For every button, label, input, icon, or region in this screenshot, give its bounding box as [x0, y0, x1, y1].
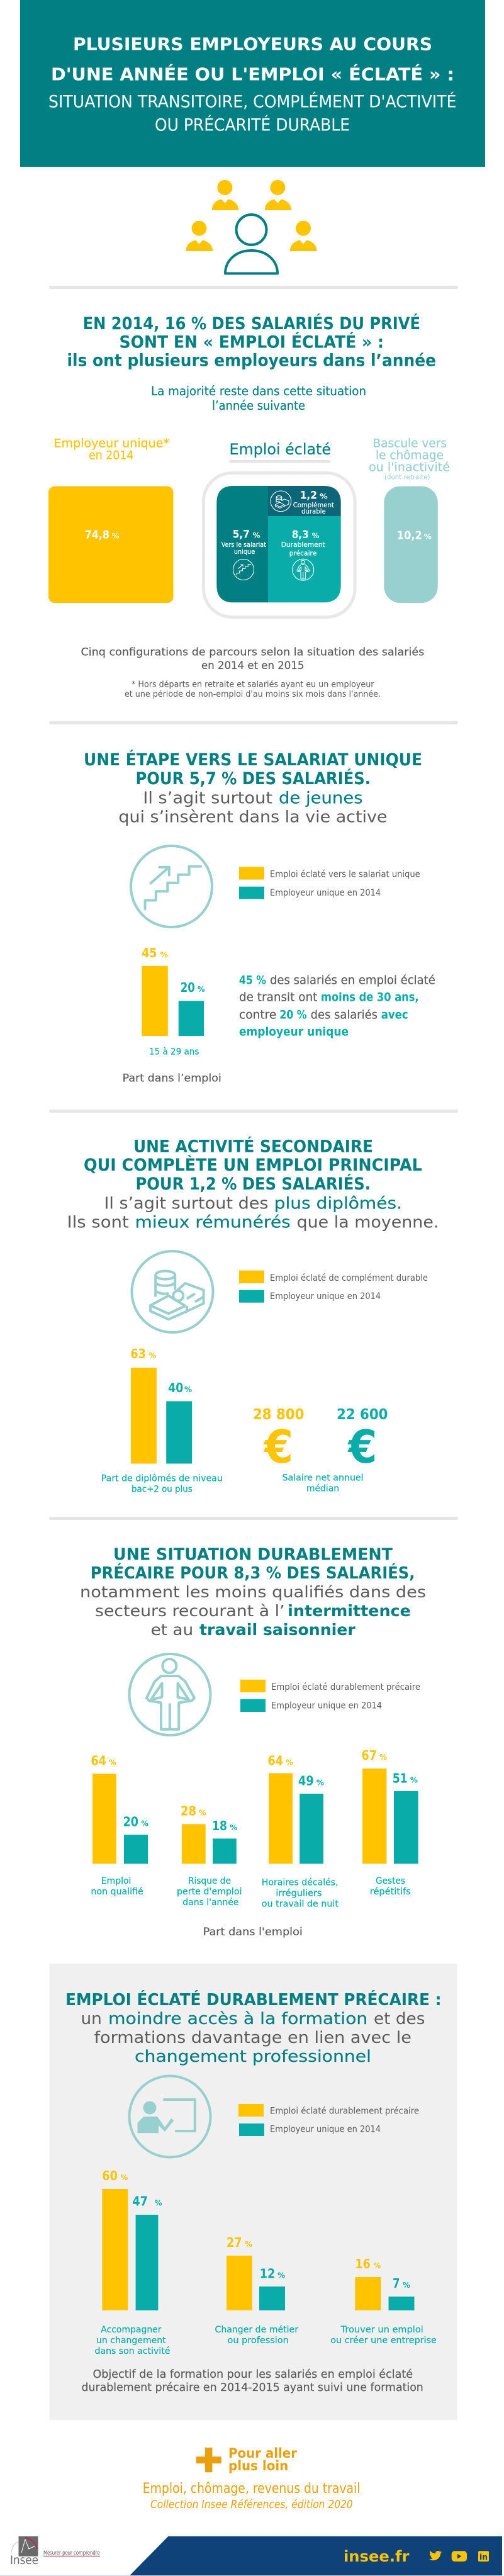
heading: lasting precarity: secteurs recourant à l’ [95, 1602, 285, 1620]
column label: unemployment or inactivity: Bascule vers [372, 437, 447, 450]
bars: change occupation: 27 [227, 2235, 242, 2250]
bars: staggered hours: % [286, 1757, 293, 1767]
legend [240, 1680, 420, 1712]
bars: support change in activity: 47 [132, 2194, 148, 2209]
bars: find a job or create a business: 16 [355, 2256, 371, 2271]
icon: person with empty pockets in circle [293, 559, 314, 580]
bar chart: graduates: % [149, 1351, 157, 1360]
salary comparison: € [347, 1420, 378, 1473]
icon: person with empty pockets [130, 1654, 210, 1735]
further reading [143, 2446, 361, 2511]
further reading title: plus loin [228, 2458, 288, 2473]
bar chart: aged 15 to 29: 15 à 29 ans [149, 1047, 199, 1057]
heading: lasting precarity: UNE SITUATION DURABLEMENT [113, 1545, 393, 1564]
legend: Emploi éclaté durablement précaire [271, 1682, 420, 1692]
bars: risk of job loss: dans l'année [182, 1898, 238, 1908]
bars: find a job or create a business [330, 2256, 437, 2346]
heading: access to training: moindre accès à la formation [108, 2010, 367, 2028]
heading: step towards single employment: Il s’agit surtout [143, 789, 272, 807]
bars: unskilled job: 20 [123, 1814, 138, 1830]
caption [82, 2368, 423, 2394]
text block: age comparison: moins de 30 ans, [321, 991, 419, 1004]
publication reference [143, 2481, 361, 2511]
heading: step towards single employment [84, 750, 422, 827]
bar chart: aged 15 to 29: Part dans l’emploi [123, 1072, 221, 1084]
salary comparison: Salaire net annuel [282, 1473, 364, 1483]
icon: linkedin [478, 2551, 489, 2562]
bars: support change in activity: Accompagner [101, 2325, 162, 2335]
heading: step towards single employment: de jeunes [279, 789, 362, 807]
heading: step towards single employment: qui s’insèrent dans la vie active [118, 808, 388, 827]
bar chart: graduates: Part de diplômés de niveau [101, 1473, 223, 1483]
logo: Insee: Insee [10, 2553, 38, 2567]
bars: find a job or create a business: % [403, 2280, 410, 2290]
bars: unskilled job: 64 [91, 1753, 106, 1768]
column label: unemployment or inactivity [369, 437, 450, 481]
heading: access to training [65, 1989, 442, 2066]
heading: step towards single employment: POUR 5,7 % DES SALARIÉS. [136, 768, 371, 789]
bar chart: aged 15 to 29 [123, 945, 221, 1084]
bars: risk of job loss: 18 [212, 1818, 227, 1833]
bar chart: graduates [101, 1346, 223, 1494]
text block: age comparison: de transit ont [239, 991, 317, 1004]
bars: unskilled job: % [141, 1819, 148, 1828]
heading: lasting precarity: notamment les moins qualifiés dans des [80, 1583, 426, 1601]
bars: repetitive movements: Gestes [376, 1876, 405, 1886]
caption: Objectif de la formation pour les salariés en emploi éclaté [93, 2368, 413, 2381]
heading: secondary activity: Ils sont [67, 1213, 129, 1232]
bars: risk of job loss [177, 1803, 242, 1908]
bars: staggered hours: Horaires décalés, [262, 1878, 339, 1888]
title text: SITUATION TRANSITOIRE, COMPLÉMENT D'ACTIVITÉ [48, 92, 457, 112]
bars: repetitive movements: 67 [361, 1748, 377, 1763]
subheading [151, 384, 366, 413]
value: lasting complement: durable [301, 509, 326, 515]
heading: secondary activity [67, 1136, 439, 1232]
bars: unskilled job: Emploi [101, 1876, 131, 1886]
heading: 16 % in fragmented employment: EN 2014, 16 % DES SALARIÉS DU PRIVÉ [83, 313, 420, 334]
value: lasting complement: 1,2 [300, 490, 317, 502]
footnote: * Hors départs en retraite et salariés ayant eu un employeur [132, 680, 374, 690]
bars: repetitive movements: % [379, 1752, 387, 1762]
panel: step towards single employment [84, 750, 435, 1084]
heading: lasting precarity: intermittence [288, 1602, 411, 1620]
title banner [20, 0, 485, 167]
heading: secondary activity: Il s’agit surtout des [104, 1194, 268, 1213]
bars: repetitive movements: % [410, 1775, 418, 1785]
column label: single employer: en 2014 [89, 449, 133, 463]
bars: risk of job loss: 28 [181, 1803, 196, 1818]
value: towards single employment [221, 528, 266, 556]
legend: Employeur unique en 2014 [270, 888, 381, 898]
heading: access to training: changement professionnel [135, 2047, 371, 2066]
bar chart: aged 15 to 29: % [160, 950, 168, 959]
bars: staggered hours [262, 1753, 339, 1910]
salary comparison: € [263, 1420, 293, 1473]
block: single employer 74,8 %: % [112, 532, 120, 541]
bar chart: aged 15 to 29: 20 [181, 980, 195, 995]
heading: 16 % in fragmented employment: SONT EN « EMPLOI ÉCLATÉ » : [120, 332, 384, 352]
further reading title [228, 2446, 298, 2473]
bars: find a job or create a business: % [374, 2261, 381, 2270]
panel: lasting precarity [80, 1545, 426, 1938]
bars: change occupation: % [277, 2270, 285, 2280]
logo: Insee: Mesurer pour comprendre [43, 2550, 100, 2556]
bars: unskilled job [91, 1753, 148, 1897]
bars: repetitive movements: 51 [393, 1771, 408, 1786]
bar chart: training objectives [94, 2168, 437, 2356]
bar chart: graduates: 63 [130, 1346, 146, 1361]
heading: access to training: et des [374, 2010, 425, 2028]
heading: secondary activity: QUI COMPLÈTE UN EMPLOI PRINCIPAL [84, 1155, 422, 1175]
heading: secondary activity: POUR 1,2 % DES SALARIÉS. [136, 1174, 371, 1194]
bars: change occupation: ou profession [228, 2336, 289, 2346]
legend: Emploi éclaté vers le salariat unique [270, 870, 420, 880]
text block: age comparison: contre [239, 1008, 276, 1021]
bars: staggered hours: % [316, 1777, 324, 1787]
bar chart: graduates: 40 [168, 1380, 183, 1395]
salary comparison: 28 800 [253, 1407, 304, 1423]
publication reference: Collection Insee Références, édition 2020 [150, 2498, 353, 2511]
subheading: l’année suivante [212, 398, 305, 413]
bars: risk of job loss: % [199, 1808, 206, 1817]
legend: Emploi éclaté de complément durable [270, 1273, 428, 1283]
icon: linkedin: in [479, 2553, 488, 2562]
column label: single employer [54, 437, 169, 463]
panel: access to training [49, 1964, 457, 2420]
text block: age comparison [239, 973, 435, 1038]
block: fragmented employment breakdown [204, 473, 355, 617]
bars: find a job or create a business: Trouver un emploi [340, 2325, 423, 2335]
panel: secondary activity [67, 1136, 439, 1494]
title text: PLUSIEURS EMPLOYEURS AU COURS [73, 34, 432, 54]
value: lastingly precarious [281, 529, 325, 557]
value: lastingly precarious: 8,3 [292, 529, 309, 541]
text block: age comparison: employeur unique [239, 1025, 349, 1038]
icon: stairs in circle [233, 559, 254, 580]
icon: employee surrounded by four employers [186, 180, 317, 273]
text block: age comparison: des salariés en emploi éclaté [270, 973, 435, 987]
logo: Insee [10, 2536, 100, 2567]
bar chart: precarity indicators: Part dans l'emploi [203, 1926, 303, 1938]
heading: secondary activity: UNE ACTIVITÉ SECONDAIRE [133, 1136, 373, 1156]
block: unemployment or inactivity 10,2 % [384, 487, 438, 603]
bars: staggered hours: 49 [298, 1774, 314, 1789]
legend: Employeur unique en 2014 [270, 1291, 381, 1302]
text block: age comparison: 20 % [279, 1008, 307, 1021]
bars: support change in activity [94, 2168, 170, 2356]
column label: unemployment or inactivity: (dont retraite) [384, 474, 430, 481]
column label: single employer: Employeur unique* [54, 437, 169, 450]
caption: durablement précaire en 2014-2015 ayant suivi une formation [82, 2381, 423, 2394]
title text [48, 34, 457, 135]
value: towards single employment: unique [234, 548, 255, 556]
value: lastingly precarious: Durablement [281, 541, 325, 549]
title text: D'UNE ANNÉE OU L'EMPLOI « ÉCLATÉ » : [51, 63, 454, 84]
column label: fragmented employment: Emploi éclaté [229, 441, 331, 458]
legend [239, 867, 420, 899]
bar chart: precarity indicators [91, 1748, 418, 1938]
icon: money in circle [271, 491, 291, 512]
bars: change occupation: 12 [260, 2266, 275, 2281]
bar chart: graduates: % [184, 1385, 192, 1394]
salary comparison: médian [306, 1484, 339, 1494]
heading: step towards single employment: UNE ÉTAPE VERS LE SALARIAT UNIQUE [84, 750, 422, 770]
publication reference: Emploi, chômage, revenus du travail [143, 2481, 361, 2497]
bars: find a job or create a business: 7 [393, 2276, 400, 2291]
legend: Employeur unique en 2014 [271, 1701, 382, 1711]
salary comparison [253, 1407, 388, 1494]
heading: 16 % in fragmented employment: ils ont plusieurs employeurs dans l’année [67, 351, 436, 371]
legend [238, 2104, 419, 2136]
value: towards single employment: 5,7 [233, 528, 250, 540]
footer [0, 2536, 502, 2576]
heading: secondary activity: que la moyenne. [297, 1213, 439, 1232]
panel: overview of trajectories [48, 313, 450, 699]
footnote: et une période de non-emploi d'au moins six mois dans l'année. [125, 690, 381, 699]
text block: age comparison: 45 % [239, 973, 266, 987]
further reading title: Pour aller [228, 2446, 298, 2461]
bars: support change in activity: un changement [96, 2336, 166, 2346]
value: lasting complement [293, 490, 334, 515]
legend: Employeur unique en 2014 [270, 2125, 381, 2135]
bar chart: graduates: bac+2 ou plus [132, 1484, 193, 1494]
icon: twitter [429, 2551, 442, 2560]
bars: staggered hours: 64 [268, 1753, 283, 1768]
icon: coins and banknotes [132, 1251, 213, 1332]
bars: change occupation [215, 2235, 298, 2346]
bars: unskilled job: % [109, 1757, 116, 1767]
caption: Cinq configurations de parcours selon la situation des salariés [81, 646, 424, 658]
value: lastingly precarious: % [312, 531, 320, 540]
footer band [130, 2536, 502, 2575]
icon: youtube [452, 2551, 467, 2562]
heading: access to training: formations davantage en lien avec le [94, 2028, 412, 2047]
bars: repetitive movements [361, 1748, 418, 1897]
legend [239, 1271, 428, 1303]
heading: lasting precarity: et au [151, 1621, 193, 1639]
heading: secondary activity: mieux rémunérés [135, 1213, 291, 1232]
bars: change occupation: % [245, 2239, 252, 2249]
bars: support change in activity: dans son activité [94, 2346, 170, 2356]
bars: repetitive movements: répétitifs [370, 1887, 411, 1897]
text block: age comparison: avec [381, 1008, 408, 1021]
bars: support change in activity: % [155, 2198, 162, 2208]
bars: support change in activity: 60 [102, 2168, 118, 2183]
bars: risk of job loss: Risque de [188, 1876, 231, 1886]
bars: staggered hours: irréguliers [276, 1889, 322, 1899]
heading: access to training: un [81, 2010, 102, 2028]
bars: find a job or create a business: ou créer une entreprise [330, 2336, 437, 2346]
footnote [125, 680, 381, 699]
bars: support change in activity: % [121, 2173, 128, 2182]
value: lasting complement: Complément [293, 502, 334, 509]
website: insee.fr [344, 2548, 410, 2565]
block: single employer 74,8 %: 74,8 [85, 529, 109, 542]
value: towards single employment: Vers le salariat [221, 541, 266, 549]
bar chart: aged 15 to 29: 45 [142, 945, 157, 960]
bars: unskilled job: non qualifié [91, 1887, 143, 1897]
column label: unemployment or inactivity: ou l'inactivité [369, 461, 450, 474]
value: lastingly precarious: précaire [289, 549, 316, 557]
heading: lasting precarity: travail saisonnier [199, 1621, 356, 1639]
heading: access to training: EMPLOI ÉCLATÉ DURABLEMENT PRÉCAIRE : [65, 1989, 442, 2010]
heading: 16 % in fragmented employment [67, 313, 436, 371]
text block: age comparison: des salariés [311, 1008, 378, 1021]
value: towards single employment: % [253, 531, 260, 539]
title text: OU PRÉCARITÉ DURABLE [155, 115, 350, 135]
bars: change occupation: Changer de métier [215, 2325, 298, 2335]
icon: plus [196, 2448, 221, 2472]
caption [81, 646, 424, 672]
legend: Emploi éclaté durablement précaire [270, 2106, 419, 2117]
salary comparison: 22 600 [337, 1407, 388, 1423]
icon: stairs [131, 846, 212, 927]
caption: en 2014 et en 2015 [201, 660, 304, 672]
heading: secondary activity: plus diplômés. [274, 1194, 402, 1213]
block: single employer 74,8 % [48, 487, 174, 603]
heading: lasting precarity: PRÉCAIRE POUR 8,3 % DES SALARIÉS, [91, 1563, 415, 1583]
block: unemployment or inactivity 10,2 %: 10,2 [397, 530, 422, 543]
icon: trainer at board [130, 2076, 210, 2157]
value: lasting complement: % [320, 492, 328, 501]
bar chart: aged 15 to 29: % [198, 984, 205, 994]
bars: staggered hours: ou travail de nuit [262, 1899, 339, 1910]
subheading: La majorité reste dans cette situation [151, 384, 366, 398]
block: unemployment or inactivity 10,2 %: % [424, 532, 432, 541]
column label: unemployment or inactivity: le chômage [376, 449, 444, 463]
heading: lasting precarity [80, 1545, 426, 1639]
bars: risk of job loss: % [230, 1823, 238, 1832]
bars: risk of job loss: perte d'emploi [177, 1887, 242, 1897]
